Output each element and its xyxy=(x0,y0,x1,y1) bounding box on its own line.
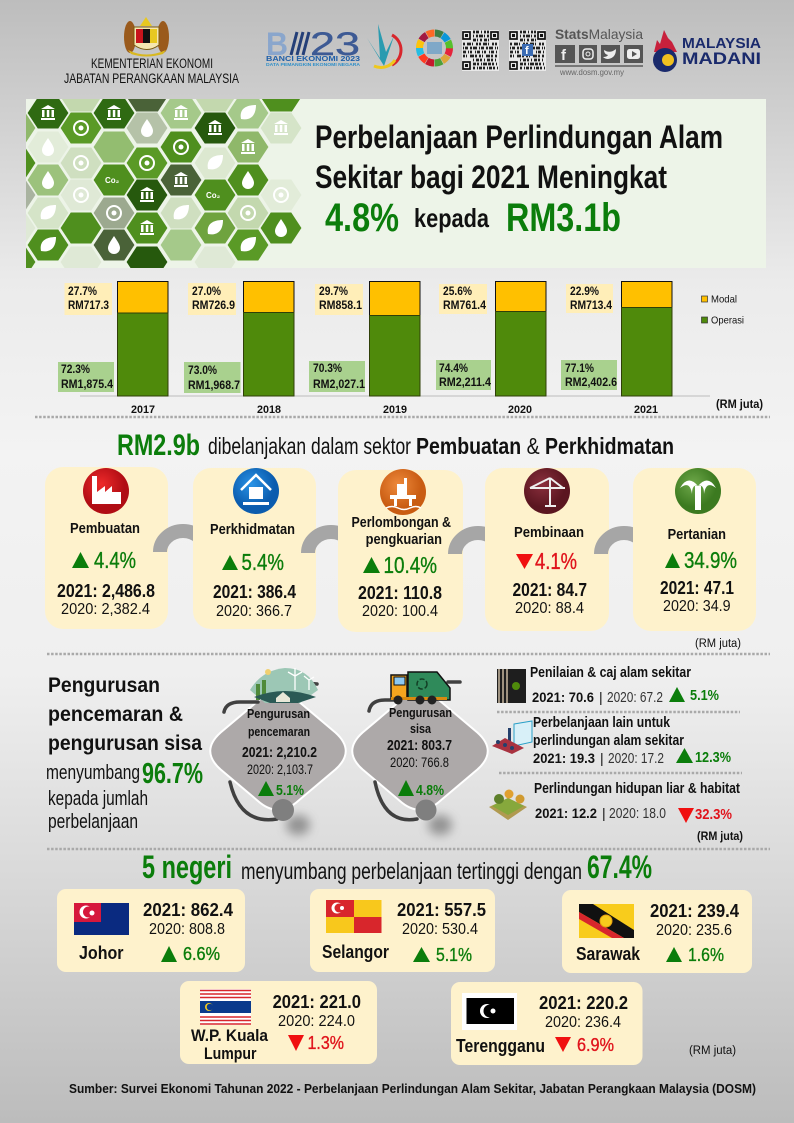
panel: pengurusan pencemaran tag: pencemaran xyxy=(248,725,310,739)
card: Pembinaan xyxy=(485,468,609,631)
card: Perlombongan & pengkuarian xyxy=(338,469,463,632)
panel: pengurusan sisa tag: sisa xyxy=(410,722,432,736)
item: Penilaian & caj alam sekitar: 2020: 67.2 xyxy=(607,690,663,706)
item: Perbelanjaan lain: perlindungan alam sekitar xyxy=(533,733,684,749)
heading: sector spending: dibelanjakan dalam sektor xyxy=(208,433,411,459)
card: Selangor xyxy=(310,889,495,972)
bar 2019 xyxy=(309,282,420,416)
panel: pengurusan pencemaran tag: 5.1% xyxy=(276,783,304,799)
logo: StatsMalaysia social icons: www.dosm.gov.my xyxy=(559,67,625,77)
card: Perlombongan & pengkuarian: 2021: 110.8 xyxy=(358,583,442,603)
card: Sarawak: 2021: 239.4 xyxy=(650,901,739,921)
bar 2017: 72.3% xyxy=(61,364,90,376)
text block: pollution and waste share xyxy=(46,674,203,833)
panel: title banner xyxy=(26,99,766,268)
item: Perbelanjaan lain: | xyxy=(600,750,604,766)
bar 2020: 25.6% xyxy=(443,286,472,298)
title text: 4.8% xyxy=(325,196,399,240)
card: Perlombongan & pengkuarian: Perlombongan & xyxy=(352,514,451,531)
card: W.P. Kuala Lumpur: W.P. Kuala xyxy=(191,1027,269,1045)
logo: Banci Ekonomi 2023: DATA PEMANGKIN EKONOMI NEGARA xyxy=(266,62,361,67)
panel: pengurusan pencemaran tag: 2020: 2,103.7 xyxy=(247,762,313,777)
logo: Banci Ekonomi 2023: BANCI EKONOMI 2023 xyxy=(266,54,360,63)
icon: palm tree xyxy=(675,468,721,514)
heading: top 5 states: 5 negeri xyxy=(142,849,232,885)
card: Perkhidmatan: 5.4% xyxy=(242,549,284,575)
logo: SDG wheel xyxy=(420,33,450,63)
card: Selangor: Selangor xyxy=(322,942,389,962)
card: Pertanian xyxy=(633,468,756,631)
item: Perbelanjaan lain xyxy=(492,715,731,767)
card: Pembuatan: 2020: 2,382.4 xyxy=(61,601,150,618)
item: Penilaian & caj alam sekitar: 5.1% xyxy=(690,688,719,704)
source note: Sumber: Survei Ekonomi Tahunan 2022 - Perbelanjaan Perlindungan Alam Sekitar, Jabatan Perangkaan Malaysia (DOSM) xyxy=(69,1081,756,1096)
item: Perbelanjaan lain: 12.3% xyxy=(695,750,731,766)
unit note: (RM juta) xyxy=(697,831,743,843)
decorative honeycomb of environment icons xyxy=(26,99,302,268)
item: Perbelanjaan lain: Perbelanjaan lain untuk xyxy=(533,715,671,731)
icon: green landscape xyxy=(250,668,318,703)
item: Perlindungan hidupan liar & habitat: 32.3% xyxy=(695,807,732,823)
icon: services xyxy=(233,468,279,514)
logo: StatsMalaysia social icons xyxy=(555,26,643,77)
card: Pertanian: Pertanian xyxy=(668,526,726,543)
QR code 2 xyxy=(509,30,546,71)
bar 2017: RM717.3 xyxy=(68,300,109,312)
connector arc 2 xyxy=(308,532,354,553)
text block: pollution and waste share: Pengurusan xyxy=(48,674,160,697)
legend: Modal xyxy=(711,294,737,306)
flag: Selangor xyxy=(326,900,382,933)
text block: pollution and waste share: kepada jumlah xyxy=(48,787,148,810)
card: Pembinaan: 4.1% xyxy=(535,548,577,574)
title text: Sekitar bagi 2021 Meningkat xyxy=(315,159,667,195)
item: Perlindungan hidupan liar & habitat: | xyxy=(602,805,606,821)
item: Perlindungan hidupan liar & habitat: 2020: 18.0 xyxy=(609,806,666,822)
logo: Banci Ekonomi 2023 xyxy=(266,26,361,67)
card: Johor: 2021: 862.4 xyxy=(143,900,233,920)
bar 2018: RM1,968.7 xyxy=(188,380,240,392)
panel: pengurusan pencemaran tag xyxy=(210,668,346,835)
heading: top 5 states: 67.4% xyxy=(587,849,652,885)
unit note: (RM juta) xyxy=(695,638,741,650)
panel: pengurusan sisa tag xyxy=(352,672,488,835)
bar 2020 xyxy=(436,282,546,416)
item: Perlindungan hidupan liar & habitat: 2021: 12.2 xyxy=(535,805,597,821)
item: Perbelanjaan lain: 2020: 17.2 xyxy=(608,751,664,767)
card: Perkhidmatan: 2021: 386.4 xyxy=(213,582,296,602)
icon: habitat park xyxy=(489,790,527,820)
legend: Operasi xyxy=(711,314,744,326)
card: Pembinaan: 2021: 84.7 xyxy=(512,580,587,600)
card: Pertanian: 34.9% xyxy=(684,547,737,573)
heading: sector spending: Pembuatan & Perkhidmatan xyxy=(416,433,674,459)
bar 2019: 29.7% xyxy=(319,286,348,298)
flag: Johor xyxy=(74,903,129,935)
header: ministry crest and name: JABATAN PERANGKAAN MALAYSIA xyxy=(64,71,239,86)
QR code 1 xyxy=(462,30,499,71)
card: Pembinaan: Pembinaan xyxy=(514,524,584,541)
flag: Terengganu xyxy=(462,993,517,1030)
decorative honeycomb of environment icons: Co₂ xyxy=(206,191,221,200)
panel: pengurusan sisa tag: 4.8% xyxy=(416,783,444,799)
item: Penilaian & caj alam sekitar: Penilaian & caj alam sekitar xyxy=(530,665,691,681)
card: Selangor: 5.1% xyxy=(436,944,472,965)
unit note: (RM juta) xyxy=(689,1045,736,1057)
bar 2017: 2017 xyxy=(131,404,155,416)
item: Perlindungan hidupan liar & habitat xyxy=(489,781,740,823)
card: Perkhidmatan: 2020: 366.7 xyxy=(216,603,292,620)
title text: RM3.1b xyxy=(506,196,621,240)
card: Johor: Johor xyxy=(79,943,124,963)
stacked bar chart: modal and operasi 2017-2021 xyxy=(58,282,763,416)
logo: Banci Ekonomi 2023: 23 xyxy=(310,26,360,62)
bar 2019: 70.3% xyxy=(313,363,342,375)
card: Selangor: 2020: 530.4 xyxy=(402,921,478,938)
header: ministry crest and name: KEMENTERIAN EKONOMI xyxy=(91,56,213,71)
card: Pembuatan: 2021: 2,486.8 xyxy=(57,581,155,601)
card: Terengganu: 2021: 220.2 xyxy=(539,993,628,1013)
card: W.P. Kuala Lumpur: 2020: 224.0 xyxy=(278,1013,355,1030)
bar 2018: 2018 xyxy=(257,404,281,416)
title text xyxy=(315,119,723,240)
bar 2018: 73.0% xyxy=(188,365,217,377)
card: Johor: 6.6% xyxy=(183,943,220,964)
bar 2017: 27.7% xyxy=(68,286,97,298)
flag: Kuala Lumpur xyxy=(200,989,251,1025)
card: Sarawak: 2020: 235.6 xyxy=(656,922,732,939)
title text: kepada xyxy=(414,203,489,233)
bar 2018 xyxy=(184,282,294,416)
card: Perkhidmatan: Perkhidmatan xyxy=(210,521,295,538)
card: Pertanian: 2021: 47.1 xyxy=(660,578,734,598)
item: Penilaian & caj alam sekitar: 2021: 70.6 xyxy=(532,689,594,705)
card: Terengganu xyxy=(451,982,642,1065)
icon: crane xyxy=(524,468,570,514)
bar 2019: RM858.1 xyxy=(319,300,363,312)
QR code 2: f xyxy=(525,45,529,57)
card: Perlombongan & pengkuarian: pengkuarian xyxy=(366,531,442,548)
heading: sector spending xyxy=(117,429,674,462)
logo: StatsMalaysia social icons: StatsMalaysia xyxy=(555,26,643,42)
icon: factory xyxy=(83,468,129,514)
text block: pollution and waste share: pencemaran & xyxy=(48,703,183,726)
card: Perkhidmatan xyxy=(193,468,316,629)
logo: Banci Ekonomi 2023: B xyxy=(266,26,288,62)
bar 2020: RM761.4 xyxy=(443,300,487,312)
heading: sector spending: RM2.9b xyxy=(117,429,200,462)
panel: sector cards xyxy=(45,467,756,650)
card: Terengganu: 2020: 236.4 xyxy=(545,1014,621,1031)
panel: pengurusan pencemaran tag: Pengurusan xyxy=(247,707,310,721)
card: Pembuatan xyxy=(45,467,168,629)
bar 2020: RM2,211.4 xyxy=(439,377,492,389)
bar 2017 xyxy=(58,282,168,416)
logo: Malaysia Madani xyxy=(653,30,761,72)
bar 2021: 2021 xyxy=(634,404,658,416)
bar 2019: 2019 xyxy=(383,404,407,416)
heading: top 5 states xyxy=(142,849,652,885)
bar 2017: RM1,875.4 xyxy=(61,379,114,391)
header: ministry crest and name xyxy=(64,17,239,86)
bar 2021: 77.1% xyxy=(565,363,594,375)
logo: Malaysia Madani: MADANI xyxy=(682,49,761,68)
card: Terengganu: 6.9% xyxy=(577,1034,614,1055)
icon: report books xyxy=(497,669,526,703)
logo: statistics hand emblem xyxy=(367,24,401,67)
bar 2020: 74.4% xyxy=(439,363,468,375)
card: Perlombongan & pengkuarian: 10.4% xyxy=(384,552,437,578)
legend xyxy=(702,294,744,326)
bar 2019: RM2,027.1 xyxy=(313,379,366,391)
connector arc 3 xyxy=(455,533,501,554)
item: Perlindungan hidupan liar & habitat: Perlindungan hidupan liar & habitat xyxy=(534,781,740,797)
item: Perbelanjaan lain: 2021: 19.3 xyxy=(533,750,595,766)
card: Pertanian: 2020: 34.9 xyxy=(663,598,731,615)
card: W.P. Kuala Lumpur: 1.3% xyxy=(308,1032,344,1053)
text block: pollution and waste share: 96.7% xyxy=(142,758,203,790)
bar 2018: RM726.9 xyxy=(192,300,235,312)
bar 2020: 2020 xyxy=(508,404,532,416)
unit note: (RM juta) xyxy=(716,399,763,411)
card: W.P. Kuala Lumpur xyxy=(180,981,377,1064)
card: Pembuatan: 4.4% xyxy=(94,547,136,573)
text block: pollution and waste share: perbelanjaan xyxy=(48,810,138,833)
card: Pembinaan: 2020: 88.4 xyxy=(515,600,584,617)
bar 2018: 27.0% xyxy=(192,286,221,298)
icon: recycling truck xyxy=(391,672,450,704)
card: Perlombongan & pengkuarian: 2020: 100.4 xyxy=(362,603,438,620)
card: Johor xyxy=(57,889,245,972)
bar 2021: RM713.4 xyxy=(570,300,613,312)
icon: classroom xyxy=(492,721,532,754)
item: Penilaian & caj alam sekitar: | xyxy=(599,689,603,705)
logo: Malaysia Madani: MALAYSIA xyxy=(682,35,761,52)
card: W.P. Kuala Lumpur: Lumpur xyxy=(204,1045,257,1063)
card: Sarawak: Sarawak xyxy=(576,944,641,964)
list: other spending categories xyxy=(489,665,743,843)
card: Terengganu: Terengganu xyxy=(456,1036,545,1056)
connector arc 4 xyxy=(601,533,647,554)
heading: top 5 states: menyumbang perbelanjaan tertinggi dengan xyxy=(241,858,582,884)
text block: pollution and waste share: pengurusan sisa xyxy=(48,732,202,755)
bar 2021: 22.9% xyxy=(570,286,599,298)
bar 2021 xyxy=(561,282,672,416)
decorative honeycomb of environment icons: Co₂ xyxy=(105,176,120,185)
flag: Sarawak xyxy=(579,904,634,938)
panel: pengurusan sisa tag: 2020: 766.8 xyxy=(390,755,449,770)
card: Sarawak xyxy=(562,890,752,973)
panel: pengurusan sisa tag: Pengurusan xyxy=(389,706,452,720)
icon: oil rig xyxy=(380,469,426,515)
icon: national crest xyxy=(124,17,169,56)
panel: pengurusan sisa tag: 2021: 803.7 xyxy=(387,737,452,754)
panel: pengurusan pencemaran tag: 2021: 2,210.2 xyxy=(242,744,317,761)
connector arc 1 xyxy=(160,531,206,552)
bar 2021: RM2,402.6 xyxy=(565,377,617,389)
card: Pembuatan: Pembuatan xyxy=(70,520,140,537)
logo: StatsMalaysia social icons: f xyxy=(561,47,567,64)
card: Johor: 2020: 808.8 xyxy=(149,921,225,938)
card: Selangor: 2021: 557.5 xyxy=(397,900,486,920)
card: W.P. Kuala Lumpur: 2021: 221.0 xyxy=(273,992,361,1012)
item: Penilaian & caj alam sekitar xyxy=(497,665,719,706)
header logos xyxy=(266,24,761,77)
text block: pollution and waste share: menyumbang xyxy=(46,761,140,784)
card: Sarawak: 1.6% xyxy=(688,944,724,965)
